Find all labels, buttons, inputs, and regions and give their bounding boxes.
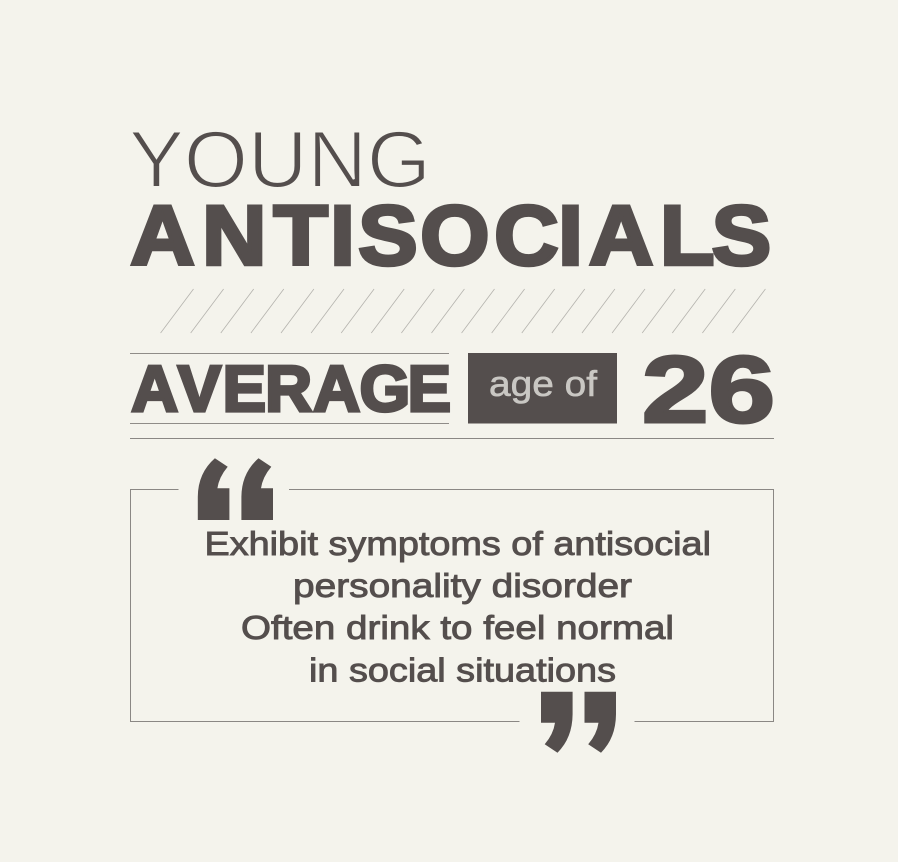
icon: opening quotation mark (198, 458, 273, 520)
divider rule (130, 438, 774, 440)
quote text (204, 525, 711, 688)
number: 26: 26 (642, 337, 775, 443)
quote frame (130, 490, 774, 722)
label box: age of: age of (489, 363, 598, 404)
icon: closing quotation mark (541, 692, 616, 753)
quote text: in social situations (309, 652, 616, 688)
quote text: Often drink to feel normal (241, 609, 674, 646)
heading: AVERAGE with rules: AVERAGE (131, 352, 451, 425)
quote text: personality disorder (293, 567, 632, 604)
title: ANTISOCIALS: ANTISOCIALS (130, 190, 771, 283)
label box: age of (468, 353, 617, 424)
title: YOUNG: YOUNG (129, 115, 431, 205)
quote text: Exhibit symptoms of antisocial (204, 525, 711, 562)
diagonal hatch band (161, 289, 765, 333)
